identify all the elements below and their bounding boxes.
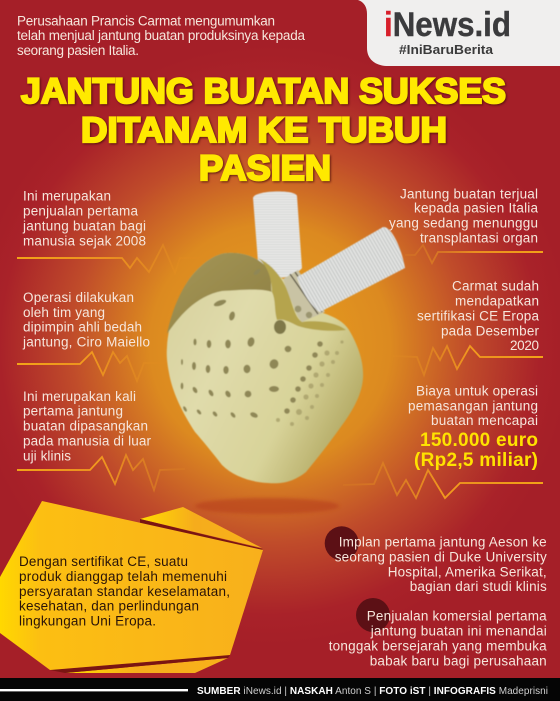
- title: PASIEN: [199, 149, 331, 188]
- bullet text: commercial sale: babak baru bagi perusahaan: [370, 653, 547, 668]
- bullet text: commercial sale: Penjualan komersial pertama: [367, 609, 547, 624]
- callout: CE certificate box: produk dianggap telah memenuhi: [19, 569, 227, 584]
- callout: CE certificate box: lingkungan Uni Eropa.: [19, 614, 156, 629]
- left text 3: buatan dipasangkan: [23, 419, 148, 434]
- bullet text: first implant: bagian dari studi klinis: [410, 579, 547, 594]
- right text 2: pada Desember: [441, 323, 540, 338]
- footer bar: SUMBER iNews.id | NASKAH Anton S | FOTO iST | INFOGRAFIS Madeprisni: [197, 686, 548, 697]
- right text 3: cost: 150.000 euro: [420, 430, 538, 451]
- heart shadow: [195, 498, 339, 514]
- right text 3: cost: (Rp2,5 miliar): [414, 450, 538, 471]
- left ECG line 1: [17, 245, 200, 273]
- left ECG line 3: [17, 455, 185, 490]
- logo panel: iNews.id: #IniBaruBerita: [399, 42, 494, 57]
- left text 3: pada manusia di luar: [23, 434, 152, 449]
- left text 2: Operasi dilakukan: [23, 290, 134, 305]
- right text 2: mendapatkan: [455, 294, 539, 309]
- bullet text: first implant: Hospital, Amerika Serikat,: [388, 564, 547, 579]
- left text 3: pertama jantung: [23, 404, 123, 419]
- left text 1: Ini merupakan: [23, 189, 111, 204]
- callout: CE certificate box: Dengan sertifikat CE, suatu: [19, 554, 188, 569]
- vertical tube: [253, 191, 302, 278]
- left text 3: uji klinis: [23, 448, 71, 463]
- right text 2: Carmat sudah: [452, 279, 539, 294]
- right text 3: cost: Biaya untuk operasi: [416, 383, 538, 398]
- right text 2: [417, 279, 540, 353]
- callout: CE certificate box: persyaratan standar keselamatan,: [19, 584, 230, 599]
- right ECG line 2: [393, 346, 543, 375]
- intro text: [17, 14, 305, 58]
- left text 2: oleh tim yang: [23, 305, 105, 320]
- bullet text: first implant: seorang pasien di Duke University: [335, 549, 547, 564]
- icon: artificial heart: [167, 191, 405, 483]
- title: JANTUNG BUATAN SUKSES: [21, 72, 506, 111]
- right text 3: cost: buatan mencapai: [431, 413, 538, 428]
- left text 1: manusia sejak 2008: [23, 233, 146, 248]
- left text 1: jantung buatan bagi: [22, 218, 146, 233]
- heart body: [167, 253, 363, 483]
- left text 2: [22, 290, 150, 350]
- bullet text: commercial sale: tonggak bersejarah yang membuka: [329, 638, 547, 653]
- intro text: telah menjual jantung buatan produksinya kepada: [17, 28, 305, 43]
- left text 2: jantung, Ciro Maiello: [22, 335, 150, 350]
- left text 2: dipimpin ahli bedah: [23, 320, 142, 335]
- right text 1: transplantasi organ: [420, 230, 538, 245]
- footer bar: [0, 678, 560, 701]
- title: [21, 72, 506, 188]
- logo panel: iNews.id: [358, 0, 560, 66]
- left text 3: [23, 389, 152, 463]
- title: DITANAM KE TUBUH: [81, 111, 447, 150]
- right text 1: kepada pasien Italia: [414, 201, 538, 216]
- darker dome: [167, 253, 272, 334]
- perforation holes: [181, 268, 323, 419]
- logo panel: iNews.id: iNews.id: [384, 6, 511, 44]
- bullet text: commercial sale: [329, 598, 547, 668]
- right ECG line 3: [343, 463, 543, 498]
- right text 2: 2020: [510, 338, 539, 353]
- right text 1: [389, 186, 538, 245]
- bullet text: first implant: [325, 526, 547, 594]
- callout: CE certificate box: [0, 501, 263, 673]
- seam band: [258, 258, 346, 331]
- right text 1: Jantung buatan terjual: [400, 186, 538, 201]
- left text 1: [22, 189, 146, 248]
- intro text: seorang pasien Italia.: [17, 43, 139, 58]
- diagonal tube: [297, 227, 405, 312]
- right text 1: yang sedang menunggu: [389, 216, 538, 231]
- callout: CE certificate box: kesehatan, dan perlindungan: [19, 599, 199, 614]
- bullet text: first implant: Implan pertama jantung Aeson ke: [339, 534, 547, 549]
- right text 2: sertifikasi CE Eropa: [417, 308, 539, 323]
- intro text: Perusahaan Prancis Carmat mengumumkan: [17, 14, 275, 28]
- left text 3: Ini merupakan kali: [23, 389, 136, 404]
- bullet text: commercial sale: jantung buatan ini menandai: [370, 623, 547, 638]
- left text 1: penjualan pertama: [23, 204, 138, 219]
- metal connector: [283, 270, 325, 322]
- right ECG line 1: [405, 245, 543, 263]
- left ECG line 2: [17, 352, 167, 381]
- right text 3: cost: [408, 383, 538, 471]
- right text 3: cost: pemasangan jantung: [408, 398, 538, 413]
